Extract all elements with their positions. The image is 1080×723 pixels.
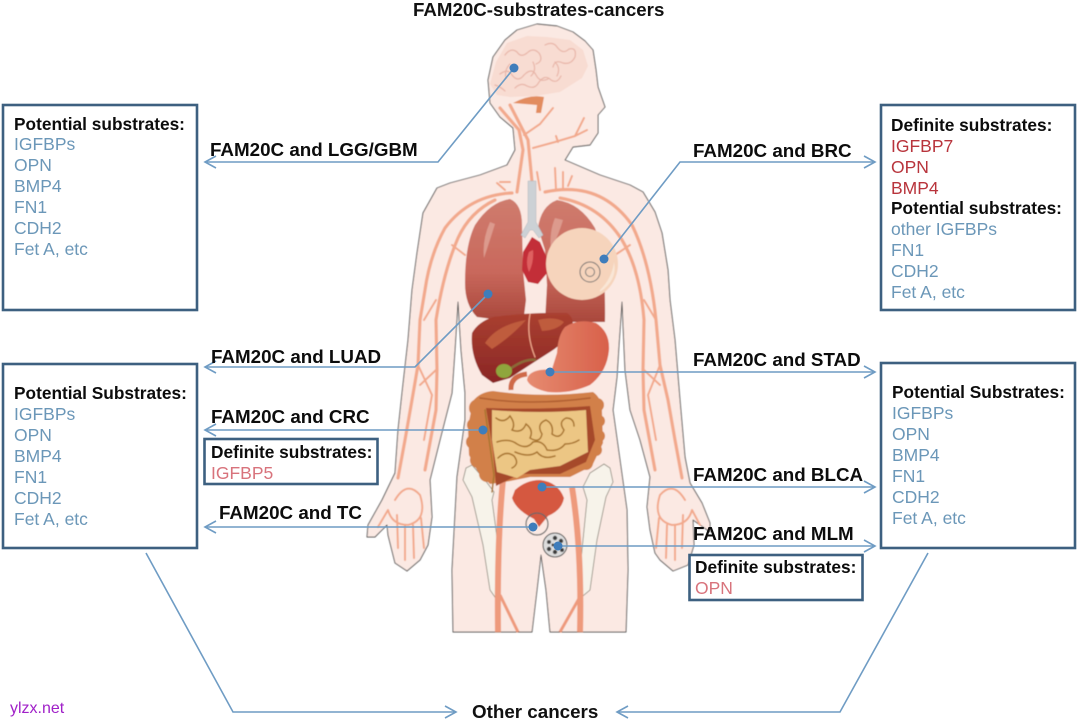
femoral arteries [498,480,581,632]
stomach [511,321,609,392]
panel: definite and potential substrates top right: IGFBP7 [891,136,953,156]
panel: definite and potential substrates top right: Definite substrates: [891,115,1052,135]
cerebellum [513,96,544,113]
connector: TC [205,502,538,533]
panel: definite and potential substrates top right: BMP4 [891,178,939,198]
panel: potential substrates top left: BMP4 [14,176,62,196]
connector: BRC [600,140,875,264]
panel: definite and potential substrates top right: FN1 [891,240,924,260]
human body anatomy illustration [367,24,710,632]
panel: potential substrates top left: IGFBPs [14,134,76,154]
trachea [521,181,543,238]
connector: MLM [554,523,875,552]
arrow: right box to other cancers [617,553,928,718]
panel: potential substrates middle left: IGFBPs [14,404,76,424]
body silhouette [367,24,710,632]
panel: definite and potential substrates top right: Fet A, etc [891,282,965,302]
panel: definite and potential substrates top right [881,105,1075,310]
panel: potential substrates middle right: Fet A, etc [892,508,966,528]
shoulder and arm arteries [398,189,682,478]
connector: STAD: FAM20C and STAD [693,349,861,370]
callout: CRC definite substrates: Definite substrates: [211,442,372,462]
connector: CRC: FAM20C and CRC [211,406,370,427]
callout: MLM definite substrates [690,555,862,600]
urethra ring [526,513,548,535]
panel: potential substrates middle right: CDH2 [892,487,940,507]
panel: potential substrates middle left: OPN [14,425,52,445]
panel: potential substrates middle right: OPN [892,424,930,444]
connector: BLCA [538,464,875,493]
callout: CRC definite substrates [204,439,378,484]
panel: potential substrates top left: CDH2 [14,218,62,238]
panel: potential substrates middle right: FN1 [892,466,925,486]
heart [522,237,548,284]
panel: definite and potential substrates top right: CDH2 [891,261,939,281]
panel: definite and potential substrates top right: OPN [891,157,929,177]
liver [472,313,573,383]
watermark: ylzx.net [10,700,65,717]
connector: STAD [546,349,875,378]
arrow: left box to other cancers [146,553,456,718]
breast tumour [546,228,618,300]
connector: CRC [205,406,488,436]
panel: potential substrates top left: Potential substrates: [14,114,185,134]
label: other cancers: Other cancers [472,701,598,722]
melanoma lesion [543,533,567,557]
panel: potential substrates middle left: CDH2 [14,488,62,508]
brain [490,36,588,97]
panel: potential substrates middle left: Fet A, etc [14,509,88,529]
connector: LGG/GBM: FAM20C and LGG/GBM [210,139,418,160]
colon [466,391,605,492]
panel: potential substrates middle right: BMP4 [892,445,940,465]
panel: definite and potential substrates top right: Potential substrates: [891,198,1062,218]
connector: BRC: FAM20C and BRC [693,140,852,161]
connector: BLCA: FAM20C and BLCA [693,464,864,485]
panel: potential substrates middle left: FN1 [14,467,47,487]
small intestine [492,410,588,478]
panel: potential substrates middle right: IGFBPs [892,403,954,423]
callout: CRC definite substrates: IGFBP5 [211,463,273,483]
callout: MLM definite substrates: OPN [695,578,733,598]
panel: potential substrates top left [3,105,197,310]
panel: potential substrates middle left [3,364,197,548]
pelvic bones [463,464,613,600]
hand arteries [378,489,700,560]
connector: MLM: FAM20C and MLM [693,523,854,544]
lungs [465,199,605,322]
panel: potential substrates top left: OPN [14,155,52,175]
panel: potential substrates top left: Fet A, etc [14,239,88,259]
panel: potential substrates middle right: Potential Substrates: [892,382,1065,402]
panel: potential substrates middle left: Potential Substrates: [14,383,187,403]
panel: potential substrates top left: FN1 [14,197,47,217]
connector: TC: FAM20C and TC [219,502,362,523]
panel: definite and potential substrates top right: other IGFBPs [891,219,997,239]
head and neck arteries [497,105,587,192]
connector: LUAD [205,290,492,373]
connector: LGG/GBM [205,64,518,168]
callout: MLM definite substrates: Definite substrates: [695,557,856,577]
panel: potential substrates middle left: BMP4 [14,446,62,466]
bladder [512,480,564,527]
connector: LUAD: FAM20C and LUAD [211,346,381,367]
gallbladder [496,360,536,378]
panel: potential substrates middle right [881,363,1075,548]
